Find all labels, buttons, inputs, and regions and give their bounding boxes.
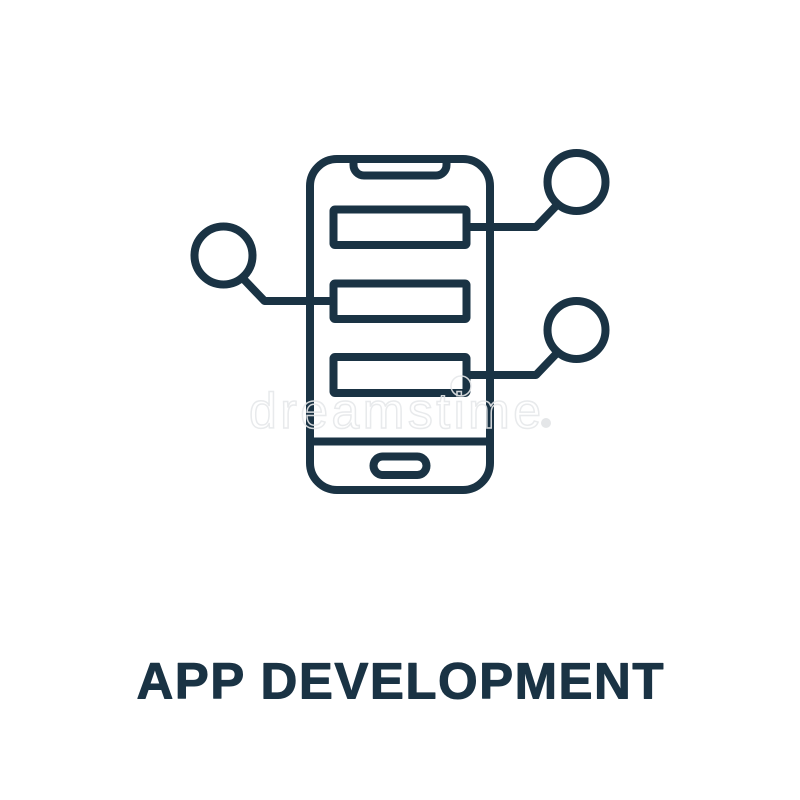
bottom list row — [334, 357, 466, 393]
middle list row — [334, 284, 466, 319]
left node connector — [244, 279, 333, 301]
icon: smartphone with connected nodes — [194, 153, 606, 490]
title: APP DEVELOPMENT — [136, 652, 664, 710]
top right node connector — [467, 205, 557, 227]
watermark: dreamstime — [249, 383, 541, 439]
home bar divider — [310, 438, 490, 446]
phone body — [310, 159, 490, 490]
left node circle — [194, 226, 252, 284]
watermark copyright mark — [451, 376, 471, 396]
top right node circle — [548, 153, 606, 211]
top list row — [334, 210, 466, 245]
phone notch — [354, 160, 446, 176]
watermark dot — [541, 418, 551, 428]
lower right node circle — [548, 301, 606, 359]
lower right node connector — [467, 353, 557, 375]
home button — [374, 456, 426, 475]
